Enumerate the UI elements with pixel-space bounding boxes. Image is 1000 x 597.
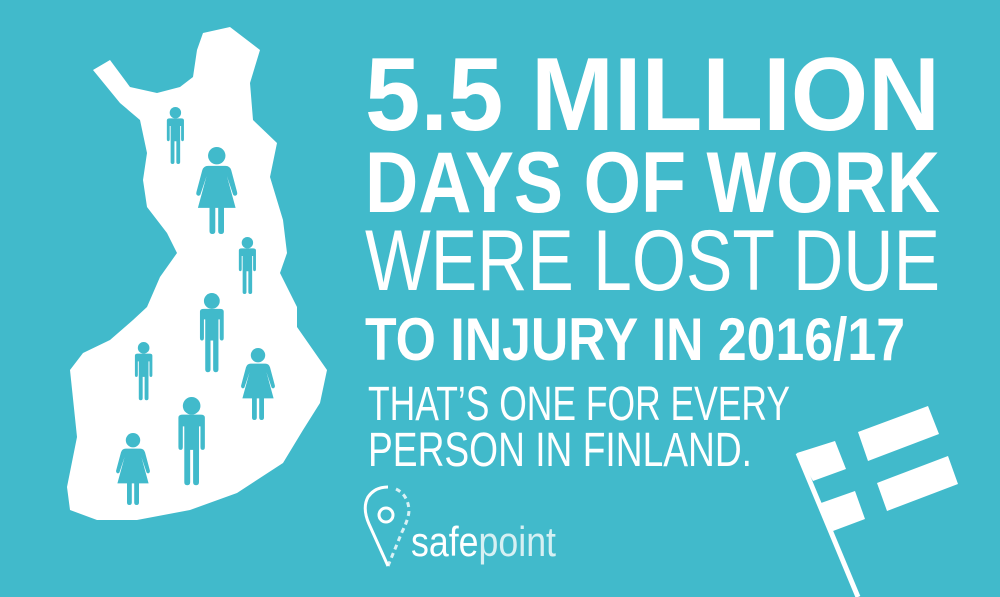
flag icon (797, 406, 958, 597)
people icons (116, 107, 275, 505)
logo: safepoint: safepoint (411, 518, 556, 565)
headline: 5.5 MILLION (365, 37, 940, 153)
subtext: THAT’S ONE FOR EVERY (368, 378, 790, 431)
subtext (368, 378, 790, 477)
headline (365, 37, 940, 373)
map: Finland (67, 27, 327, 520)
headline: TO INJURY IN 2016/17 (365, 306, 905, 373)
subtext: PERSON IN FINLAND. (368, 424, 752, 477)
logo: safepoint (365, 487, 556, 566)
